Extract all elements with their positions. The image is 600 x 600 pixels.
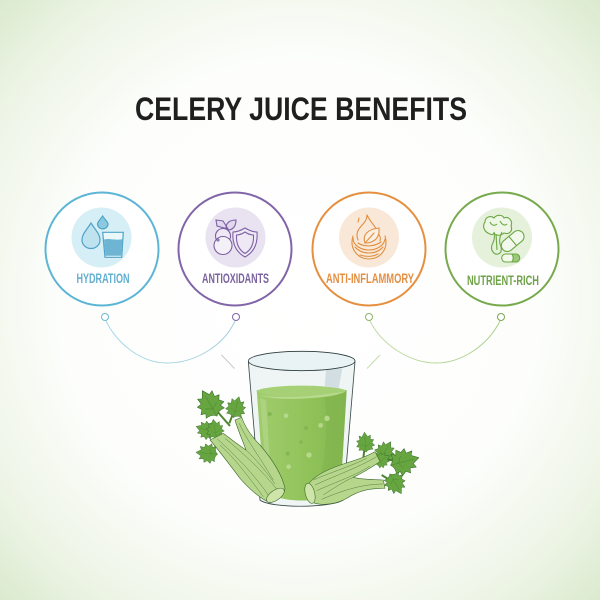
- label: nutrient-rich: NUTRIENT-RICH: [467, 273, 539, 288]
- glass of juice: [248, 351, 355, 506]
- panel: antioxidants: [178, 192, 292, 306]
- label: antioxidants: ANTIOXIDANTS: [202, 271, 269, 286]
- panel: nutrient-rich: [446, 192, 558, 306]
- icon: flame and leaf: [352, 215, 386, 259]
- label: anti-inflammatory: ANTI-INFLAMMORY: [326, 271, 414, 286]
- arrow: left pointer: [222, 355, 234, 368]
- celery bunch: right: [303, 431, 422, 504]
- icon: water drops and glass: [82, 216, 123, 257]
- connector: left arc: [102, 314, 240, 363]
- connector: right arc: [366, 314, 504, 363]
- panel: hydration: [46, 192, 158, 306]
- icon: berries and shield: [214, 220, 257, 257]
- panel: anti-inflammatory: [312, 192, 426, 306]
- celery bunch: left: [191, 384, 287, 505]
- illustration: juice glass and celery: [191, 351, 422, 506]
- label: hydration: HYDRATION: [76, 271, 130, 286]
- icon: broccoli, celery and capsules: [484, 215, 527, 262]
- title: CELERY JUICE BENEFITS: [135, 91, 467, 127]
- arrow: right pointer: [367, 355, 380, 368]
